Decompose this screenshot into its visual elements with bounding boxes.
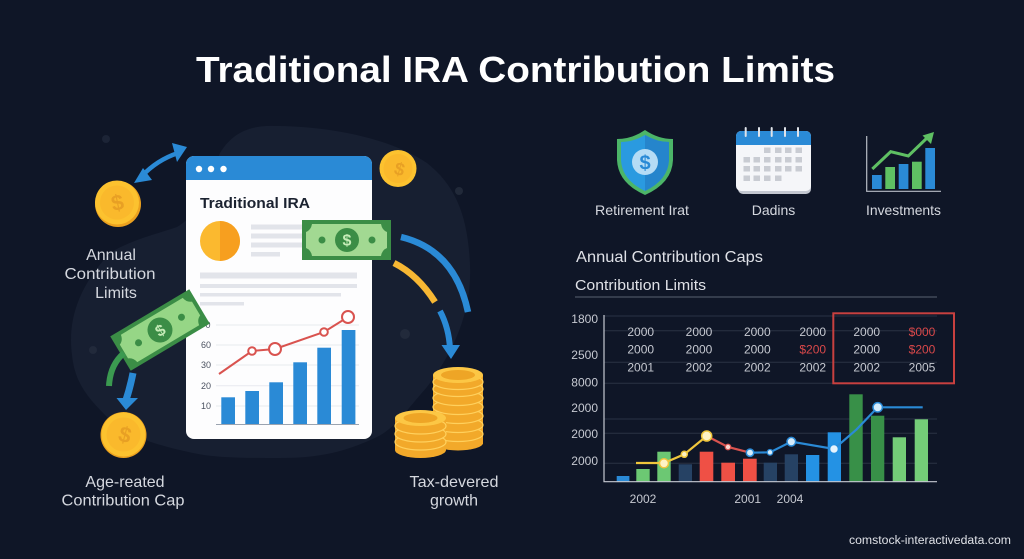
label: Retirement Irat: Retirement Irat xyxy=(595,202,689,218)
data table: 2000 xyxy=(853,325,880,339)
icon: calendar xyxy=(736,128,811,194)
text placeholder lines xyxy=(200,224,357,306)
label: Annual Contribution Limits: Annual xyxy=(86,247,136,264)
icon: coin bottom left xyxy=(100,412,146,458)
y-axis labels: 2000 xyxy=(571,454,598,468)
data table: 2005 xyxy=(909,361,936,375)
panel: Traditional IRA document xyxy=(186,156,372,439)
back coin stack xyxy=(433,367,483,450)
icon: shield: $ xyxy=(639,152,651,174)
label: Age-reated Contribution Cap xyxy=(62,474,185,510)
panel: contribution chart xyxy=(571,312,954,506)
icon: coin top right xyxy=(380,150,416,187)
arrow: down to bottom coin xyxy=(116,373,138,410)
icon: coin top left: $ xyxy=(109,189,126,216)
data table: $200 xyxy=(909,343,936,357)
subheading: Contribution Limits: Contribution Limits xyxy=(575,277,706,294)
label: Annual Contribution Limits: Limits xyxy=(95,285,137,302)
y-axis labels: 2000 xyxy=(571,401,598,415)
bar and line chart: 10 xyxy=(201,401,211,411)
data table: 2000 xyxy=(686,343,713,357)
front coin stack xyxy=(395,410,446,458)
heading: Annual Contribution Caps: Annual Contribution Caps xyxy=(576,249,763,266)
label: Dadins: Dadins xyxy=(752,202,795,218)
arrow: green arc from bill xyxy=(109,353,124,386)
y-axis labels: 2500 xyxy=(571,348,598,362)
data table: 2002 xyxy=(744,361,771,375)
data table: 2002 xyxy=(686,361,713,375)
icon: coin top left xyxy=(95,180,141,227)
y-axis labels: 2000 xyxy=(571,427,598,441)
icon: tilted dollar bill xyxy=(110,289,210,371)
icon: dollar bill on document xyxy=(302,220,391,260)
bar and line chart: 60 xyxy=(201,340,211,350)
data table: 2000 xyxy=(627,343,654,357)
label: Investments: Investments xyxy=(866,202,941,218)
y-axis labels xyxy=(571,312,598,468)
x-axis labels: 2004 xyxy=(777,492,804,506)
icon: coin stacks xyxy=(395,367,483,458)
bar and line chart: 20 xyxy=(201,381,211,391)
data table: 2000 xyxy=(799,325,826,339)
y-axis labels: 8000 xyxy=(571,376,598,390)
data table: 2000 xyxy=(853,343,880,357)
y-axis labels: 1800 xyxy=(571,312,598,326)
bar and line chart xyxy=(201,311,359,424)
arrow: right yellow arc xyxy=(394,263,435,302)
footer source: comstock-interactivedata.com xyxy=(849,535,1011,547)
bars xyxy=(617,394,928,482)
title: Traditional IRA Contribution Limits xyxy=(196,49,835,90)
arrow: right blue arc xyxy=(401,237,468,312)
data table: 2000 xyxy=(686,325,713,339)
highlight box xyxy=(833,313,954,383)
icon: pie circle xyxy=(200,221,240,261)
document header bar xyxy=(186,156,372,180)
label: Tax-devered growth: growth xyxy=(430,492,478,510)
data table: 2000 xyxy=(744,325,771,339)
icon: tilted dollar bill: $ xyxy=(153,322,169,341)
data table xyxy=(627,325,936,375)
bar and line chart: 30 xyxy=(201,360,211,370)
bar and line chart: 0 xyxy=(205,320,211,330)
data table: 2000 xyxy=(627,325,654,339)
trend lines xyxy=(636,407,923,463)
document heading: Traditional IRA xyxy=(200,195,310,212)
icon: shield xyxy=(617,130,673,195)
label: Age-reated Contribution Cap: Contribution Cap xyxy=(62,492,185,510)
x-axis labels: 2001 xyxy=(734,492,761,506)
arrow: double-headed top left xyxy=(134,143,187,183)
label: Age-reated Contribution Cap: Age-reated xyxy=(85,474,165,491)
data table: 2000 xyxy=(744,343,771,357)
data table: $000 xyxy=(909,325,936,339)
data table: 2002 xyxy=(799,361,826,375)
icon: investments chart xyxy=(867,132,941,191)
icon: dollar bill on document: $ xyxy=(343,232,352,250)
label: Tax-devered growth xyxy=(410,474,498,510)
data table: $200 xyxy=(799,343,826,357)
trend markers xyxy=(660,403,882,468)
label: Annual Contribution Limits: Contribution xyxy=(64,266,156,283)
x-axis labels xyxy=(630,492,804,506)
label: Tax-devered growth: Tax-devered xyxy=(410,474,498,491)
x-axis labels: 2002 xyxy=(630,492,657,506)
label: Annual Contribution Limits xyxy=(64,247,156,302)
chart axes xyxy=(604,315,937,482)
data table: 2002 xyxy=(853,361,880,375)
icon: coin bottom left: $ xyxy=(116,421,134,448)
icon: coin top right: $ xyxy=(392,158,407,180)
arrow: down to coin stack xyxy=(440,311,460,359)
data table: 2001 xyxy=(627,361,654,375)
